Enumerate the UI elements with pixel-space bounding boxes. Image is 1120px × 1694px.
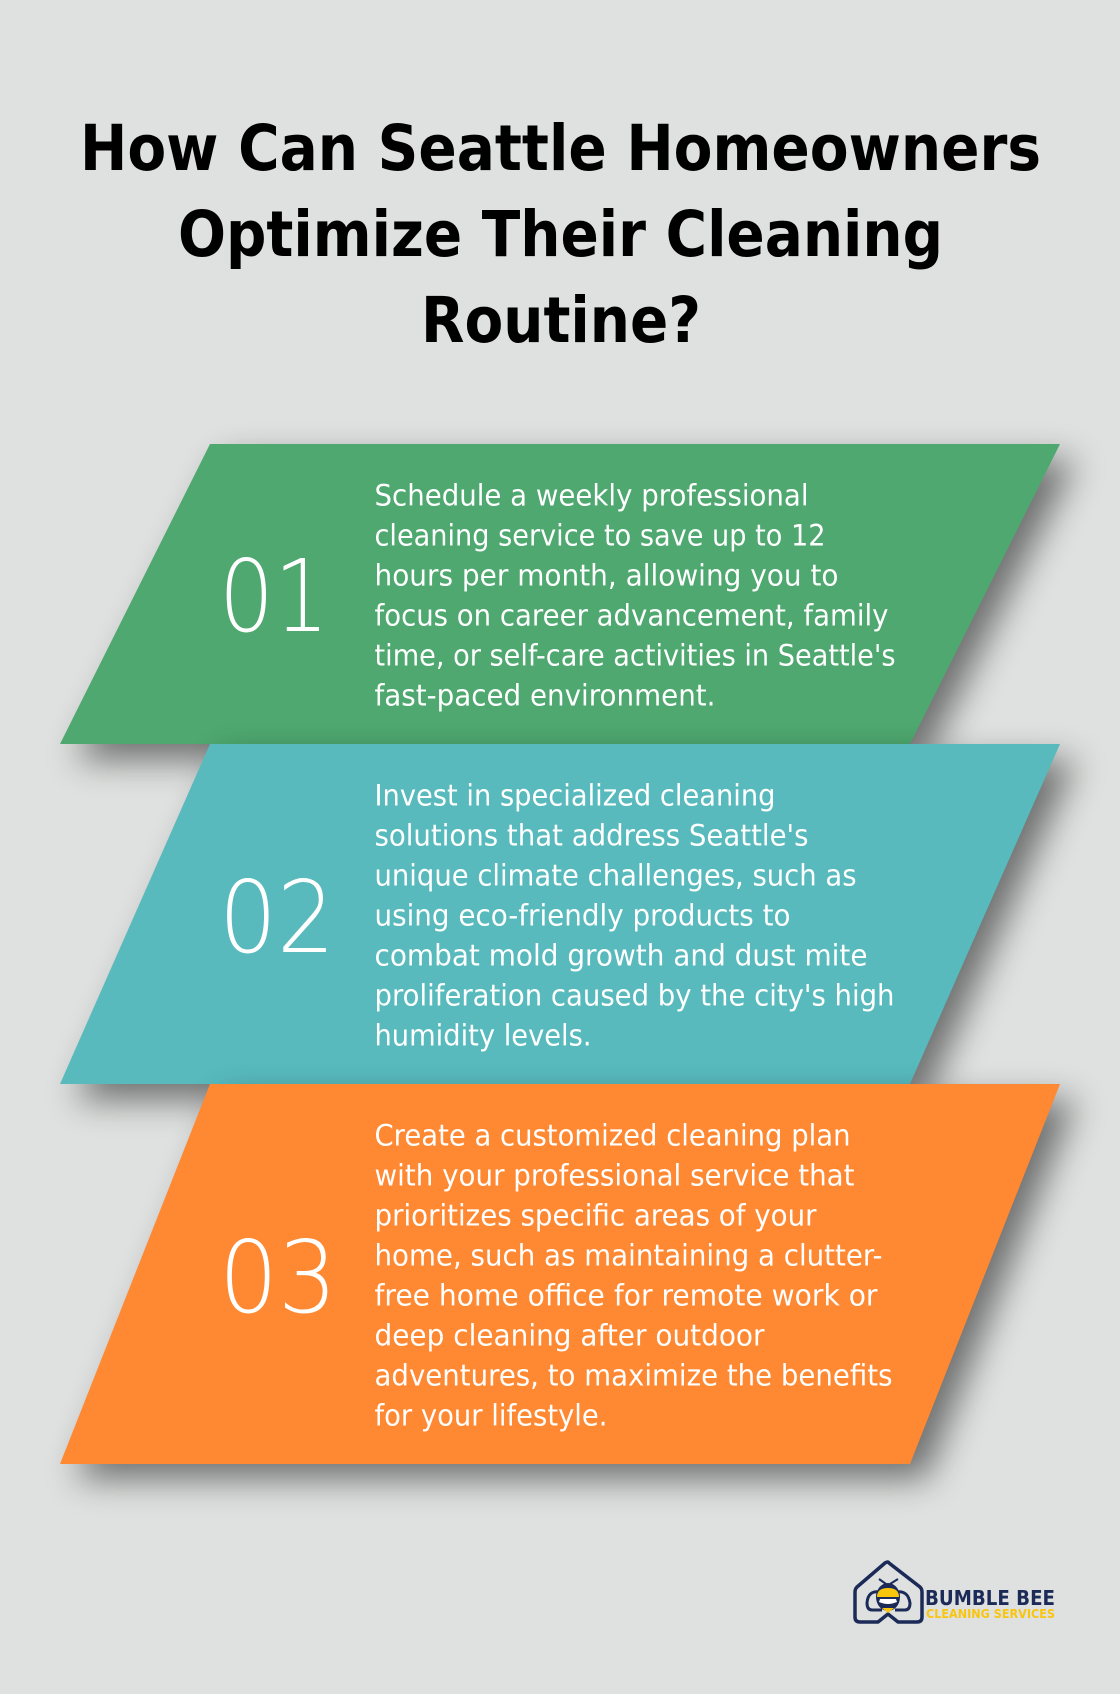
text: step 02: proliferation caused by the city's high <box>374 978 894 1012</box>
text: step 03: deep cleaning after outdoor <box>374 1318 765 1352</box>
text: step 02: Invest in specialized cleaning <box>374 778 776 812</box>
panel: step 03 <box>60 1084 1076 1479</box>
logo text: BUMBLE BEE <box>925 1586 1055 1610</box>
text: step 03: free home office for remote work or <box>374 1278 878 1312</box>
band: green <box>60 444 1060 744</box>
band: orange <box>60 1084 1060 1464</box>
text: step 03: with your professional service that <box>374 1158 854 1192</box>
text: step 01: focus on career advancement, family <box>374 598 888 632</box>
text: step 03 <box>374 1118 892 1432</box>
text: step 02: combat mold growth and dust mite <box>374 938 868 972</box>
text: step 02: humidity levels. <box>374 1018 592 1052</box>
logo text: CLEANING SERVICES <box>926 1606 1055 1621</box>
text: step 02 <box>374 778 894 1052</box>
text: step 03: home, such as maintaining a clutter- <box>374 1238 882 1272</box>
text: step 01: time, or self-care activities in Seattle's <box>374 638 896 672</box>
panel: step 02 <box>60 744 1076 1100</box>
text: step 02: using eco-friendly products to <box>374 898 790 932</box>
logo text <box>925 1586 1055 1621</box>
text: step 01 <box>374 478 896 712</box>
icon: house with bee <box>855 1562 922 1622</box>
panel: step 01 <box>60 444 1076 760</box>
logo: Bumble Bee Cleaning Services <box>855 1562 1055 1622</box>
text: step 03: adventures, to maximize the benefits <box>374 1358 892 1392</box>
text: step 01: fast-paced environment. <box>374 678 716 712</box>
text: step 01: cleaning service to save up to 12 <box>374 518 826 552</box>
text: step 03: prioritizes specific areas of your <box>374 1198 817 1232</box>
text: step 03: for your lifestyle. <box>374 1398 608 1432</box>
title: Routine? <box>421 284 701 357</box>
number 03: 03 <box>219 1219 337 1336</box>
text: step 03: Create a customized cleaning plan <box>374 1118 850 1152</box>
text: step 02: solutions that address Seattle's <box>374 818 808 852</box>
band: teal <box>60 744 1060 1084</box>
number 02: 02 <box>219 859 335 976</box>
text: step 02: unique climate challenges, such as <box>374 858 856 892</box>
title <box>80 112 1041 357</box>
title: How Can Seattle Homeowners <box>80 112 1041 185</box>
text: step 01: hours per month, allowing you to <box>374 558 838 592</box>
text: step 01: Schedule a weekly professional <box>374 478 808 512</box>
number 01: 01 <box>219 538 329 655</box>
title: Optimize Their Cleaning <box>178 198 943 271</box>
